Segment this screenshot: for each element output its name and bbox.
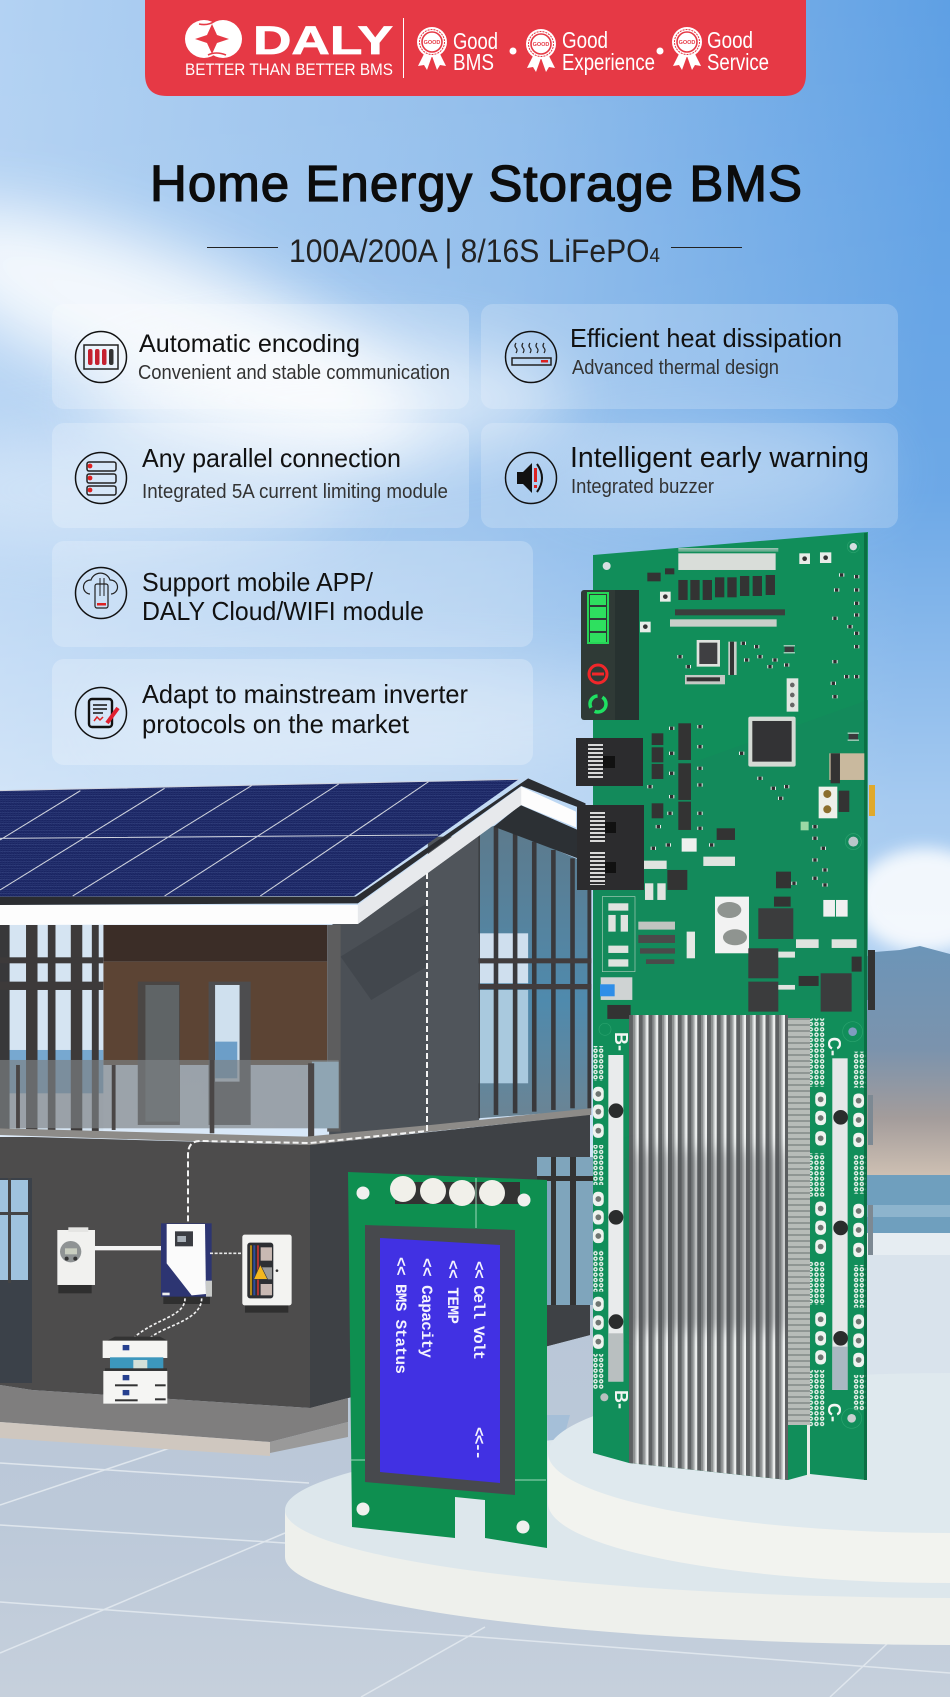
LCD display board (348, 1172, 547, 1548)
label: good experience (562, 27, 655, 75)
heatsink (629, 1015, 810, 1480)
medal: good BMS: GOOD (424, 40, 440, 46)
icon: parallel battery (76, 452, 126, 504)
medal: good BMS (417, 27, 447, 70)
heading: Automatic encoding (139, 330, 360, 358)
LED status indicator (581, 590, 639, 720)
panel: heat dissipation (481, 304, 898, 409)
lower tier (285, 1422, 950, 1645)
logo wordmark: DALY (253, 19, 393, 63)
house (0, 778, 593, 1456)
heading (142, 679, 468, 739)
panel: mobile app and cloud (52, 541, 533, 647)
lower storey of house (0, 1115, 590, 1408)
medal: good experience: GOOD (533, 42, 549, 48)
heading: Any parallel connection (142, 443, 401, 473)
battery stack (103, 1337, 167, 1404)
title: Home Energy Storage BMS (150, 155, 802, 212)
label: good BMS (453, 28, 498, 75)
RJ45 port double (577, 805, 644, 890)
heading: Support mobile APP/ (142, 567, 374, 597)
push buttons (390, 1176, 520, 1206)
mountains and water (860, 946, 950, 1255)
heading: Efficient heat dissipation (570, 323, 842, 353)
label: good service: Service (707, 49, 769, 75)
label: good service (707, 27, 769, 75)
logo mark (185, 20, 242, 58)
icon: heat (506, 332, 556, 382)
heading: protocols on the market (142, 709, 410, 739)
heading: Adapt to mainstream inverter (142, 679, 468, 709)
upper tier (548, 1373, 950, 1583)
subtitle: 100A/200A | 8/16S LiFePO4 (289, 233, 660, 269)
PCB components, upper section (600, 541, 864, 1019)
panel: parallel connection (52, 423, 469, 528)
LCD menu text: <<-- (469, 1427, 487, 1460)
RJ45 port single (576, 738, 643, 786)
LCD menu text: << Capacity (417, 1258, 435, 1358)
LCD frame (365, 1225, 515, 1495)
LCD menu text: << Cell Volt (469, 1261, 487, 1360)
distribution box (242, 1235, 292, 1313)
label: good experience: Good (562, 27, 608, 53)
heading (142, 567, 424, 626)
blue DIP switch (600, 977, 632, 1019)
description: Advanced thermal design (572, 357, 779, 379)
label: good experience: Experience (562, 49, 655, 75)
label: good BMS: BMS (453, 49, 494, 75)
main BMS board (576, 532, 875, 1480)
LCD menu text: << TEMP (443, 1260, 461, 1324)
panel: automatic encoding (52, 304, 469, 409)
icon: cloud and phone (76, 568, 126, 618)
LCD screen (380, 1238, 500, 1483)
board silkscreen labels: B- (611, 1390, 631, 1409)
LCD menu text: << BMS Status (391, 1257, 409, 1374)
medal: good service: GOOD (679, 40, 695, 46)
icon: protocol document (76, 688, 126, 738)
mounting screws (356, 1186, 530, 1534)
header banner (145, 0, 806, 96)
label: good BMS: Good (453, 28, 498, 54)
sky background (0, 0, 950, 1300)
podium (285, 1373, 950, 1645)
side tabs (868, 785, 875, 1255)
medal: good service (672, 27, 702, 70)
heading: DALY Cloud/WIFI module (142, 596, 424, 626)
upper storey of house (0, 778, 591, 1145)
conduit: dashed cable (188, 873, 427, 1223)
panel: early warning (481, 423, 898, 528)
board silkscreen labels: C- (824, 1403, 844, 1422)
board silkscreen labels: C- (824, 1037, 844, 1056)
panel: inverter protocols (52, 659, 533, 765)
description: Integrated buzzer (571, 476, 714, 498)
slogan: BETTER THAN BETTER BMS (185, 60, 393, 79)
icon: DIP switch (76, 332, 126, 382)
label: good service: Good (707, 27, 753, 53)
floor (0, 1255, 950, 1697)
LCD menu text (391, 1257, 487, 1460)
inverter (161, 1223, 212, 1304)
description: Convenient and stable communication (138, 362, 450, 384)
home energy equipment (57, 1223, 292, 1404)
description: Integrated 5A current limiting module (142, 481, 448, 503)
board silkscreen labels: B- (611, 1032, 631, 1051)
medal: good experience (526, 29, 556, 72)
icon: buzzer (506, 452, 556, 504)
terminal busbars and pads (593, 1018, 865, 1428)
board silkscreen labels (611, 1032, 844, 1422)
heading: Intelligent early warning (570, 442, 869, 474)
electric meter (57, 1227, 95, 1293)
